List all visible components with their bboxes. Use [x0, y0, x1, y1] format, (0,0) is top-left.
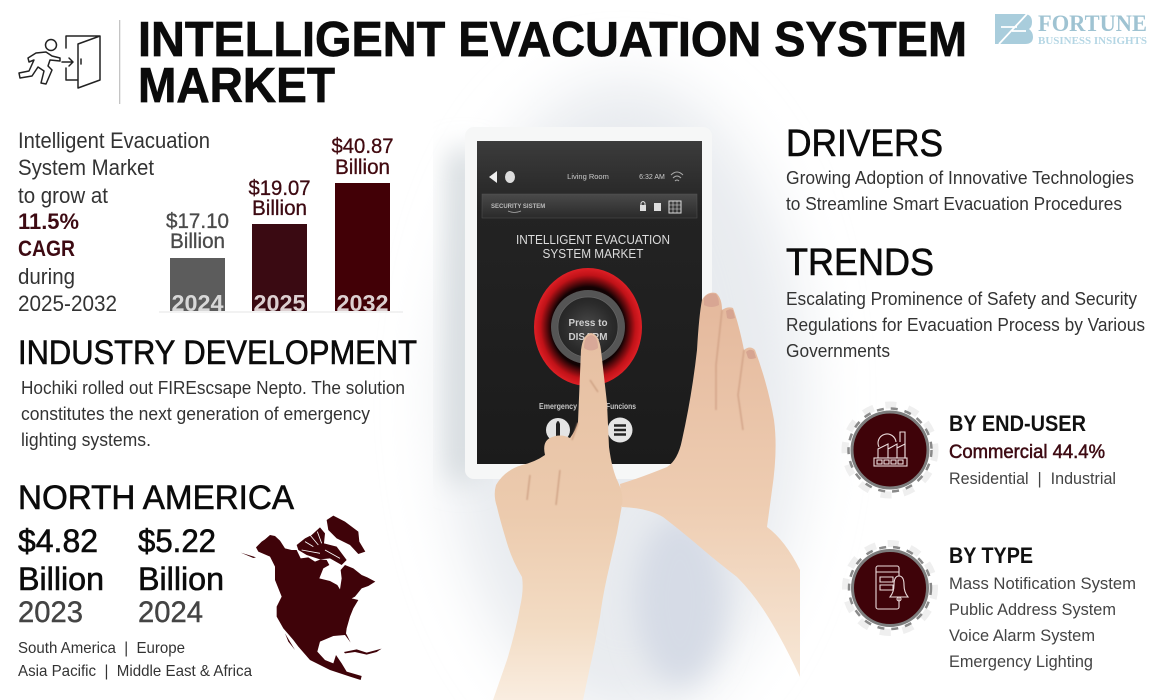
screen title — [516, 232, 670, 261]
by type: Voice Alarm System — [949, 626, 1095, 645]
logo: Fortune Business Insights — [995, 11, 1147, 47]
CAGR text block: CAGR — [18, 236, 75, 261]
header icon: person running to exit door — [19, 36, 100, 88]
CAGR text block: 2025-2032 — [18, 291, 117, 316]
logo: Fortune Business Insights: BUSINESS INSIGHTS — [1038, 35, 1147, 47]
drivers text — [786, 168, 1134, 214]
tablet — [465, 127, 712, 479]
trends text — [786, 289, 1145, 361]
other regions: South America | Europe — [18, 640, 185, 657]
title — [138, 13, 967, 113]
by end-user: Commercial 44.4% — [949, 442, 1105, 463]
value 2023: $4.82 — [18, 523, 98, 559]
trends text: Governments — [786, 341, 890, 361]
by type: Public Address System — [949, 600, 1116, 619]
by type: BY TYPE — [949, 543, 1033, 568]
other regions: Asia Pacific | Middle East & Africa — [18, 663, 252, 680]
CAGR text block: Intelligent Evacuation — [18, 128, 210, 153]
bar 2024: $17.10 — [166, 210, 229, 233]
value 2024: $5.22 — [138, 523, 216, 559]
bar 2025: 2025 — [254, 290, 306, 316]
title: INTELLIGENT EVACUATION SYSTEM — [138, 13, 967, 67]
heading: industry development: INDUSTRY DEVELOPMENT — [18, 334, 417, 372]
CAGR text block: during — [18, 264, 75, 289]
CAGR text block — [18, 128, 210, 316]
drivers text: Growing Adoption of Innovative Technologies — [786, 168, 1134, 188]
title: MARKET — [138, 59, 335, 113]
bar 2032: 2032 — [336, 290, 388, 316]
trends text: Regulations for Evacuation Process by Various — [786, 315, 1145, 335]
value 2024: Billion — [138, 561, 224, 597]
screen title: INTELLIGENT EVACUATION — [516, 232, 670, 247]
by type — [949, 543, 1136, 671]
heading: north america: NORTH AMERICA — [18, 479, 294, 517]
status bar: 6:32 AM — [639, 174, 665, 181]
by end-user: Residential | Industrial — [949, 469, 1116, 488]
industry development text — [21, 378, 405, 450]
disarm button — [534, 268, 642, 386]
industry development text: constitutes the next generation of emergency — [21, 404, 370, 424]
tablet frame — [465, 127, 712, 479]
security bar: SECURITY SISTEM — [491, 204, 545, 210]
drivers text: to Streamline Smart Evacuation Procedures — [786, 194, 1122, 214]
bar 2024: Billion — [170, 230, 225, 253]
value 2023: 2023 — [18, 596, 83, 629]
emergency controls: Emergency — [539, 402, 577, 411]
value 2024: 2024 — [138, 596, 203, 629]
disarm button: DISARM — [568, 331, 608, 343]
bar 2024 — [166, 210, 229, 316]
emergency controls: Funcions — [606, 402, 636, 411]
bar 2032: Billion — [335, 156, 390, 179]
by type: Emergency Lighting — [949, 652, 1093, 671]
status bar: Living Room — [567, 172, 609, 181]
map: North America — [241, 516, 382, 680]
bar 2025: $19.07 — [248, 177, 310, 200]
other regions — [18, 640, 252, 680]
bar chart: market size — [159, 135, 403, 316]
by type: Mass Notification System — [949, 574, 1136, 593]
photo background: wall — [445, 80, 805, 700]
disarm button: Press to — [568, 317, 608, 329]
header divider — [119, 20, 120, 104]
CAGR text block: 11.5% — [18, 209, 79, 234]
trends text: Escalating Prominence of Safety and Security — [786, 289, 1137, 309]
heading: trends: TRENDS — [786, 242, 934, 284]
bar 2032: $40.87 — [332, 135, 394, 158]
bar 2032 — [332, 135, 394, 316]
security bar — [482, 194, 697, 218]
heading: drivers: DRIVERS — [786, 123, 943, 165]
industry development text: Hochiki rolled out FIREscsape Nepto. The solution — [21, 378, 405, 398]
tablet screen — [477, 141, 702, 464]
by end-user — [949, 411, 1116, 488]
screen title: SYSTEM MARKET — [542, 246, 644, 261]
emergency controls — [539, 402, 636, 442]
CAGR text block: to grow at — [18, 183, 108, 208]
industry development text: lighting systems. — [21, 430, 151, 450]
value 2023 — [18, 523, 104, 629]
bar 2025 — [248, 177, 310, 316]
logo: Fortune Business Insights: FORTUNE — [1038, 11, 1147, 36]
hand: right hand on tablet — [620, 293, 800, 677]
CAGR text block: System Market — [18, 155, 154, 180]
status bar — [489, 171, 683, 183]
icon: factory gear — [845, 405, 935, 495]
value 2023: Billion — [18, 561, 104, 597]
value 2024 — [138, 523, 224, 629]
bar 2024: 2024 — [172, 290, 224, 316]
icon: phone with bell — [846, 544, 934, 632]
by end-user: BY END-USER — [949, 411, 1086, 436]
bar 2025: Billion — [252, 197, 307, 220]
hand: left hand pressing button — [493, 333, 622, 700]
